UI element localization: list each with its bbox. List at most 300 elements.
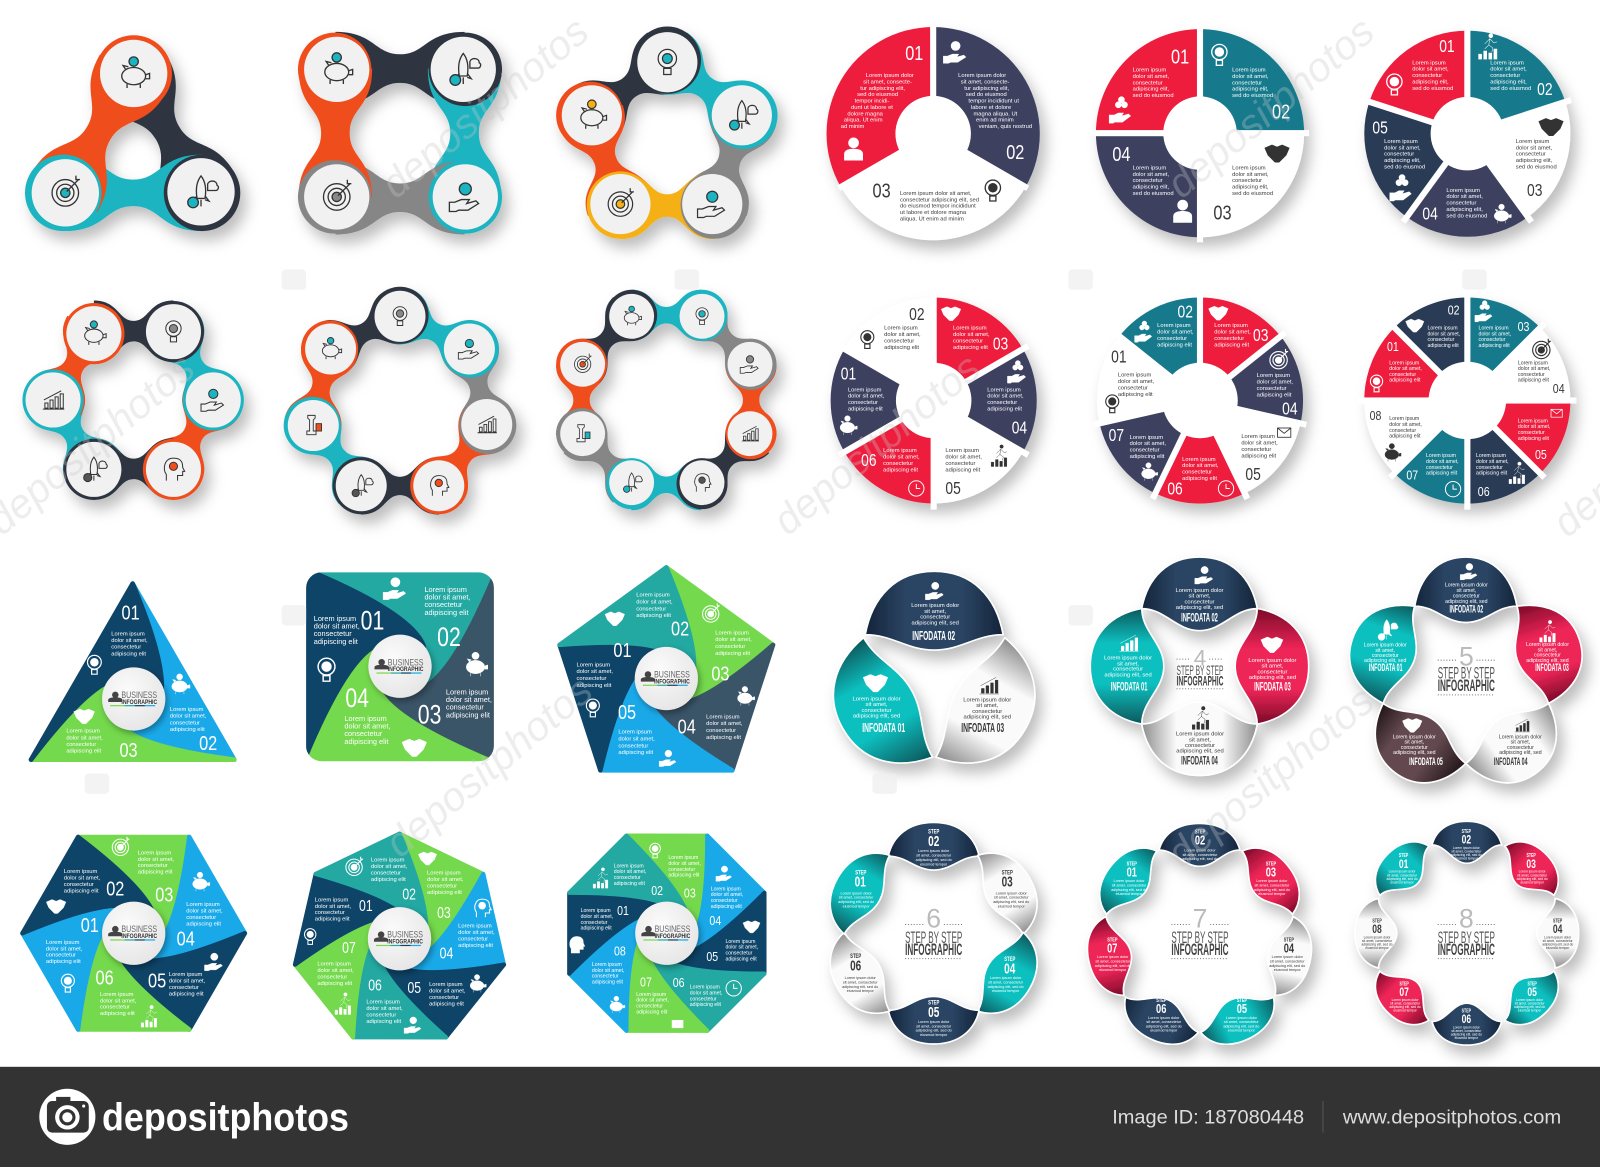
segment 05 [148,953,222,997]
segment 03 [941,307,1008,354]
segment 01: adipiscing elit [577,683,612,689]
step 01: Lorem ipsum dolor [1389,870,1416,874]
step 08: Lorem ipsum dolor [1364,935,1391,939]
segment 02: dolor sit amet, [884,332,921,338]
segment 02: 02 [671,617,689,640]
segment 06: consectetur [690,996,717,1002]
leaf 01: Lorem ipsum dolor [1364,643,1407,649]
step 04: adipiscing elit, sed do [1269,964,1305,968]
segment 01: Lorem ipsum [314,614,356,623]
step 07 [1095,937,1131,972]
segment 08 [1370,408,1422,461]
step 04: eiusmod tempor [992,989,1020,993]
segment 01: dolor sit amet, [111,638,148,644]
step 02: 02 [1195,834,1205,848]
center badge: BUSINESS [388,657,423,667]
segment 01: dolor sit amet, [1389,366,1422,372]
leaf 05: sit amet, [1404,740,1424,746]
segment 03 [1516,118,1563,200]
segment 01: 01 [1111,348,1127,367]
step 06: adipiscing elit, sed do [842,985,878,989]
segment 04: dolor sit amet, [711,892,743,898]
step 02: STEP [1462,828,1471,834]
segment 06 [861,448,924,496]
leaf 02: Lorem ipsum dolor [1175,588,1224,594]
leaf 01: INFODATA 01 [1369,662,1403,674]
diagram: triangle swirl [0,584,242,848]
step 05 [916,1000,952,1037]
segment 04: adipiscing elit [458,943,493,949]
segment 04 [1422,188,1511,224]
swirl blades [0,584,242,848]
segment 08: Lorem ipsum [1389,416,1419,422]
center badge: INFOGRAPHIC [121,699,157,706]
leaf 04: adipiscing elit, sed [1499,750,1542,756]
segment 05: adipiscing elit [726,956,757,962]
leaf 02: sit amet, [1457,588,1476,594]
step 08: eiusmod tempor [1365,946,1390,950]
segment 02: consectetur [636,606,666,612]
segment 07: 07 [1109,427,1124,446]
step 02 [1451,828,1482,861]
segment 02: 02 [106,877,124,900]
segment 02: adipiscing elit, [1490,80,1527,86]
metaball body [22,300,244,500]
segment 03: consectetur [1214,336,1244,342]
step 01 [1387,852,1418,884]
segment 01: ad minim [841,124,865,130]
step 02: eiusmod tempor [920,862,948,866]
leaf 01: INFODATA 01 [1111,680,1148,693]
segment 01: consectetur [1133,80,1163,86]
metaball body [284,287,516,515]
step 06: 06 [850,958,861,974]
center title: 8 [1459,904,1474,934]
segment 04: Lorem ipsum [1518,360,1548,366]
segment 01 [1106,348,1155,413]
leaf 02: adipiscing elit, sed [1445,599,1488,605]
segment 04: 04 [440,944,454,962]
segment 06: Lorem ipsum [366,1000,400,1006]
segment 05: Lorem ipsum [1241,434,1275,440]
segment 03: adipiscing elit, [1516,158,1553,164]
segment 04: 04 [1112,142,1131,166]
segment 06: adipiscing elit [690,1002,721,1008]
segment 01: Lorem ipsum [1412,60,1446,66]
diagram: 6-leaf ring [815,823,1052,1044]
swirl blades [514,543,806,833]
leaf 04: sit amet, [1511,740,1530,746]
segment 07: 07 [640,975,652,990]
step 06: eiusmod tempor [1455,1036,1479,1040]
segment 02: dolor sit amet, [371,864,408,870]
segment 02: dolor sit amet, [636,600,673,606]
segment 02: consectetur [170,720,200,726]
segment 03: Lorem ipsum [427,871,461,877]
leaf 03: adipiscing elit, sed [1526,658,1569,664]
step 04: 04 [1004,961,1015,977]
segment 08: 08 [1370,408,1382,423]
step 06: Lorem ipsum dolor [845,976,877,980]
step 05: sit amet, consectetur [916,1024,952,1028]
segment 03: dolor sit amet, [1516,145,1553,151]
step 07: eiusmod tempor [1099,968,1127,972]
leaf 03: consectetur [1534,653,1561,659]
segment 04 [987,361,1027,438]
step 05: eiusmod tempor [1228,1029,1256,1033]
segment 03 [873,179,1001,223]
leaves [815,823,1052,1044]
segment 01: 01 [1439,38,1455,56]
center badge [102,902,165,965]
segment 04: dolor sit amet, [186,909,223,915]
metaball body [556,290,777,510]
leaf 04: adipiscing elit, sed [1176,749,1224,755]
nodes and icons [560,294,772,505]
segment 05: sed do eiusmod [1384,165,1425,171]
leaf 05: adipiscing elit, sed [1393,750,1436,756]
segment 02: adipiscing elit [1157,343,1192,349]
diagram: 6-segment ring [800,272,1068,529]
sector gaps and hole [838,291,1030,510]
ring sectors [788,15,1040,279]
segment 04 [1257,349,1298,419]
segment 03: 03 [1213,201,1232,224]
segment 04: adipiscing elit [711,904,742,910]
segment 03: Lorem ipsum [1479,326,1509,332]
leaf 03 [961,677,1011,735]
diagram: 8-leaf ring [1355,821,1579,1045]
step 03: sit amet, consectetur [994,896,1029,900]
step 02: 02 [1462,833,1471,847]
segment 01: consectetur [1118,385,1148,391]
diagram: 3-segment ring [788,15,1040,279]
segment 06: adipiscing elit [366,1019,402,1025]
center badge: BUSINESS [387,930,423,940]
segment 04 [1518,339,1565,396]
step 08: sit amet, consectetur [1362,939,1393,943]
segment 01: 01 [361,606,384,636]
segment 03: dolor sit amet, [1214,330,1251,336]
segment 02 [170,674,217,754]
step 07: adipiscing elit, sed do [1390,1005,1421,1009]
step 02: Lorem ipsum dolor [918,849,950,853]
leaves [1080,823,1319,1056]
step 01 [838,870,874,909]
step 04: Lorem ipsum dolor [1272,955,1304,959]
segment 07: dolor sit amet, [317,968,354,974]
segment 01: consectetur [46,953,76,959]
leaf 05: consectetur [1401,745,1428,751]
segment 02 [593,863,663,898]
segment 05: dolor sit amet, [429,989,466,995]
diagram: 5-leaf ring [1337,557,1595,803]
nodes and icons [32,40,235,227]
step 01: adipiscing elit, sed do [838,900,874,904]
step 06: adipiscing elit, sed do [1146,1025,1182,1029]
segment 03: 03 [1518,319,1530,334]
step 07: sit amet, consectetur [1390,1002,1421,1006]
segment 01: adipiscing elit [111,651,146,657]
segment 07: dolor sit amet, [1426,459,1459,465]
leaf 02: adipiscing elit, sed [1176,605,1223,611]
diagram: 7-leaf ring [1080,823,1319,1056]
leaf 01: sit amet, [1375,648,1395,654]
diagram: 6-leaf ring: STEP BY STEP [905,929,962,947]
diagram: 3-node metaball [25,35,240,231]
center title: 5 [1459,641,1474,671]
segment 07: adipiscing elit [1130,454,1165,460]
segment 04: consectetur [706,728,736,734]
segment 04 [440,899,495,962]
step 04: Lorem ipsum dolor [1544,935,1572,939]
segment 05: 05 [1245,466,1261,485]
segment 05: consectetur [618,743,648,749]
segment 03: Lorem ipsum [66,729,100,735]
segment 07: adipiscing elit [1426,471,1458,477]
segment 05: Lorem ipsum [1384,139,1418,145]
segment 04: sed do eiusmod [1133,191,1174,197]
segment 05: adipiscing elit [1241,453,1277,459]
segment 03: consectetur [1479,337,1506,343]
segment 05 [706,921,760,965]
segment 06: dolor sit amet, [100,998,137,1004]
segment 06: 06 [861,451,877,470]
center title [1438,904,1495,959]
segment 04: consectetur [1257,386,1287,392]
diagram: 5-segment ring [1327,9,1596,275]
segment 08: adipiscing elit [1389,434,1421,440]
segment 05 [945,445,1007,498]
step 01: sit amet, consectetur [839,896,874,900]
segment 01: tur adipiscing elit, [860,86,905,92]
step 05: adipiscing elit, sed do [916,1029,952,1033]
step 01: sit amet, consectetur [1112,883,1147,887]
segment 07 [317,938,356,1014]
step 04: sit amet, consectetur [1543,939,1574,943]
leaf 03 [1248,637,1297,693]
segment 06: dolor sit amet, [883,454,920,460]
segment 03: consectetur [138,863,168,869]
segment 01: consectetur [111,645,141,651]
segment 01: adipiscing elit [581,926,612,932]
segment 04: 04 [1012,419,1027,438]
leaf 02: sit amet, [924,609,947,615]
diagram: 7-segment ring [1082,273,1331,528]
segment 08: dolor sit amet, [1389,422,1422,428]
segment 01: sed do eiusmod [1412,86,1453,92]
segment 01 [1387,38,1455,95]
step 03: 03 [1266,866,1276,880]
segment 03: consectetur [953,338,983,344]
step 01: 01 [1127,866,1137,880]
leaf 04 [1494,719,1542,768]
step 02: sit amet, consectetur [1183,853,1218,857]
step 01: 01 [855,874,866,890]
segment 02: consectetur [1428,337,1455,343]
segment 05: adipiscing elit [169,991,204,997]
segment 06: consectetur [100,1005,130,1011]
leaf 01: sit amet, [866,702,888,708]
segment 05 [1518,409,1562,462]
step 03: 03 [1526,857,1536,871]
segment 02: Lorem ipsum dolor [958,73,1006,79]
step 07: sit amet, consectetur [1095,960,1131,964]
step 06 [842,953,878,993]
step 03 [1517,852,1548,884]
diagram: 8-segment ring [1343,276,1592,525]
segment 03: sed do eiusmod [1516,165,1557,171]
segment 03: consectetur [66,742,96,748]
segment 02: 02 [199,731,217,754]
segment 02: Lorem ipsum [636,593,670,599]
segment 02 [46,869,124,913]
step 01: eiusmod tempor [1116,892,1143,896]
segment 05: Lorem ipsum [169,972,203,978]
step 06: eiusmod tempor [1150,1029,1178,1033]
diagram: 4-leaf ring [1090,557,1309,775]
segment 04: consectetur [1133,178,1163,184]
step 05: sit amet, consectetur [1224,1020,1259,1024]
segment 04: adipiscing elit [706,735,741,741]
step 03: eiusmod tempor [1258,892,1286,896]
segment 03 [650,843,701,901]
leaves [1355,821,1579,1045]
leaf 04: INFODATA 04 [1181,754,1218,767]
step 04: eiusmod tempor [1274,968,1301,972]
ring sectors [1343,276,1592,525]
step 03: Lorem ipsum dolor [1519,870,1547,874]
segment 04: adipiscing elit [987,407,1022,413]
segment 07: 07 [1406,467,1418,483]
segment 04: Lorem ipsum [1446,188,1480,194]
center title [1171,904,1229,959]
segment 06 [1476,453,1525,499]
segment 01: adipiscing elit [848,407,883,413]
segment 01 [304,897,373,944]
step 03: STEP [1002,870,1013,877]
leaf 04: consectetur [1507,745,1534,751]
nodes and icons [288,291,512,511]
leaf 03: Lorem ipsum dolor [1248,658,1297,664]
center title: INFOGRAPHIC [1438,677,1495,695]
step 02: Lorem ipsum dolor [1453,846,1481,850]
segment 02: veniam, quis nostrud [979,124,1032,130]
leaf 05: Lorem ipsum dolor [1393,734,1436,740]
segment 04: Lorem ipsum [458,924,492,930]
segment 02: sed do eiusmod [966,92,1007,98]
segment 01: consectetur [314,629,352,638]
segment 01: adipiscing elit [1118,392,1153,398]
diagram: 4-node metaball [298,32,502,234]
segment 06: dolor sit amet, [1476,459,1509,465]
leaf 03 [1526,620,1569,674]
segment 02: Lorem ipsum [1157,323,1191,329]
segment 03: adipiscing elit [1479,343,1510,349]
segment 04: Lorem ipsum [711,886,741,892]
segment 05: adipiscing elit, [1384,158,1421,164]
step 03: Lorem ipsum dolor [996,891,1028,895]
segment 01: consectetur [577,676,607,682]
segment 02: dolor sit amet, [1428,331,1460,337]
step 01: adipiscing elit, sed do [1111,888,1147,892]
step 05: STEP [928,1000,940,1007]
segment 06: Lorem ipsum [1476,453,1506,459]
segment 01: sed do eiusmod [1133,93,1174,99]
step 04: eiusmod tempor [1546,946,1570,950]
step 03: Lorem ipsum dolor [1256,879,1288,883]
segment 01: sit amet, consecte- [863,79,912,85]
segment 05 [1241,428,1291,485]
step 02: eiusmod tempor [1455,857,1479,861]
leaf 02: INFODATA 02 [912,628,955,643]
watermarks: depositphotos [1158,8,1383,207]
segment 04 [344,684,427,757]
segment 02 [1135,303,1194,349]
step 08: adipiscing elit, sed do [1362,942,1393,946]
leaf 05 [1393,718,1443,768]
segment 02 [605,593,689,640]
segment 06: Lorem ipsum [883,448,917,454]
step 03: adipiscing elit, sed do [1254,888,1290,892]
leaf 01: INFODATA 01 [862,720,905,735]
step 07 [1390,981,1421,1013]
watermarks: depositphotos [1158,677,1383,876]
diagram: octagon swirl [541,807,793,1059]
diagram: 4-leaf ring: INFOGRAPHIC [1177,674,1223,690]
segment 04: consectetur [1446,201,1476,207]
segment 04: consectetur [987,400,1017,406]
segment 05: Lorem ipsum [726,939,755,945]
step 03 [993,870,1029,909]
step 02: STEP [1195,829,1206,836]
segment 04: dolor sit amet, [344,722,390,731]
segment 01: dolor sit amet, [577,669,613,675]
segment 04: adipiscing elit [186,921,221,927]
segment 03: dolor sit amet, [1479,331,1511,337]
segment 02: enim ad minim [976,118,1014,124]
segment 06: consectetur [366,1013,396,1019]
center badge: BUSINESS [654,670,690,680]
segment 02: sed do eiusmod [1490,86,1531,92]
segment 01: dolor sit amet, [848,394,885,400]
segment 01: tempor incidi- [855,99,889,105]
segment 01: dolor sit amet, [314,622,360,631]
step 06: sit amet, consectetur [1146,1020,1182,1024]
segment 03: Lorem ipsum [953,326,987,332]
step 06: STEP [1462,1008,1471,1014]
leaf 02: consectetur [1453,594,1480,600]
leaf 02: adipiscing elit, sed [912,620,959,626]
segment 05: 05 [1535,447,1547,462]
sector gaps and hole [1358,291,1577,510]
leaf 02 [911,582,959,643]
segment 01 [1109,44,1189,123]
leaf 04: INFODATA 04 [1494,756,1528,768]
ring sectors [800,272,1068,529]
segment 03: dolor sit amet, [66,735,103,741]
step 03: adipiscing elit, sed do [993,900,1029,904]
segment 07: adipiscing elit [317,981,353,987]
segment 03: adipiscing elit [715,651,750,657]
segment 07: consectetur [636,1004,663,1010]
center title [1438,641,1495,695]
step 03: sit amet, consectetur [1517,873,1548,877]
segment 07: consectetur [1426,465,1453,471]
leaf 02: sit amet, [1189,594,1211,600]
step 05: Lorem ipsum dolor [1226,1016,1258,1020]
segment 04: dolor sit amet, [1518,366,1550,372]
